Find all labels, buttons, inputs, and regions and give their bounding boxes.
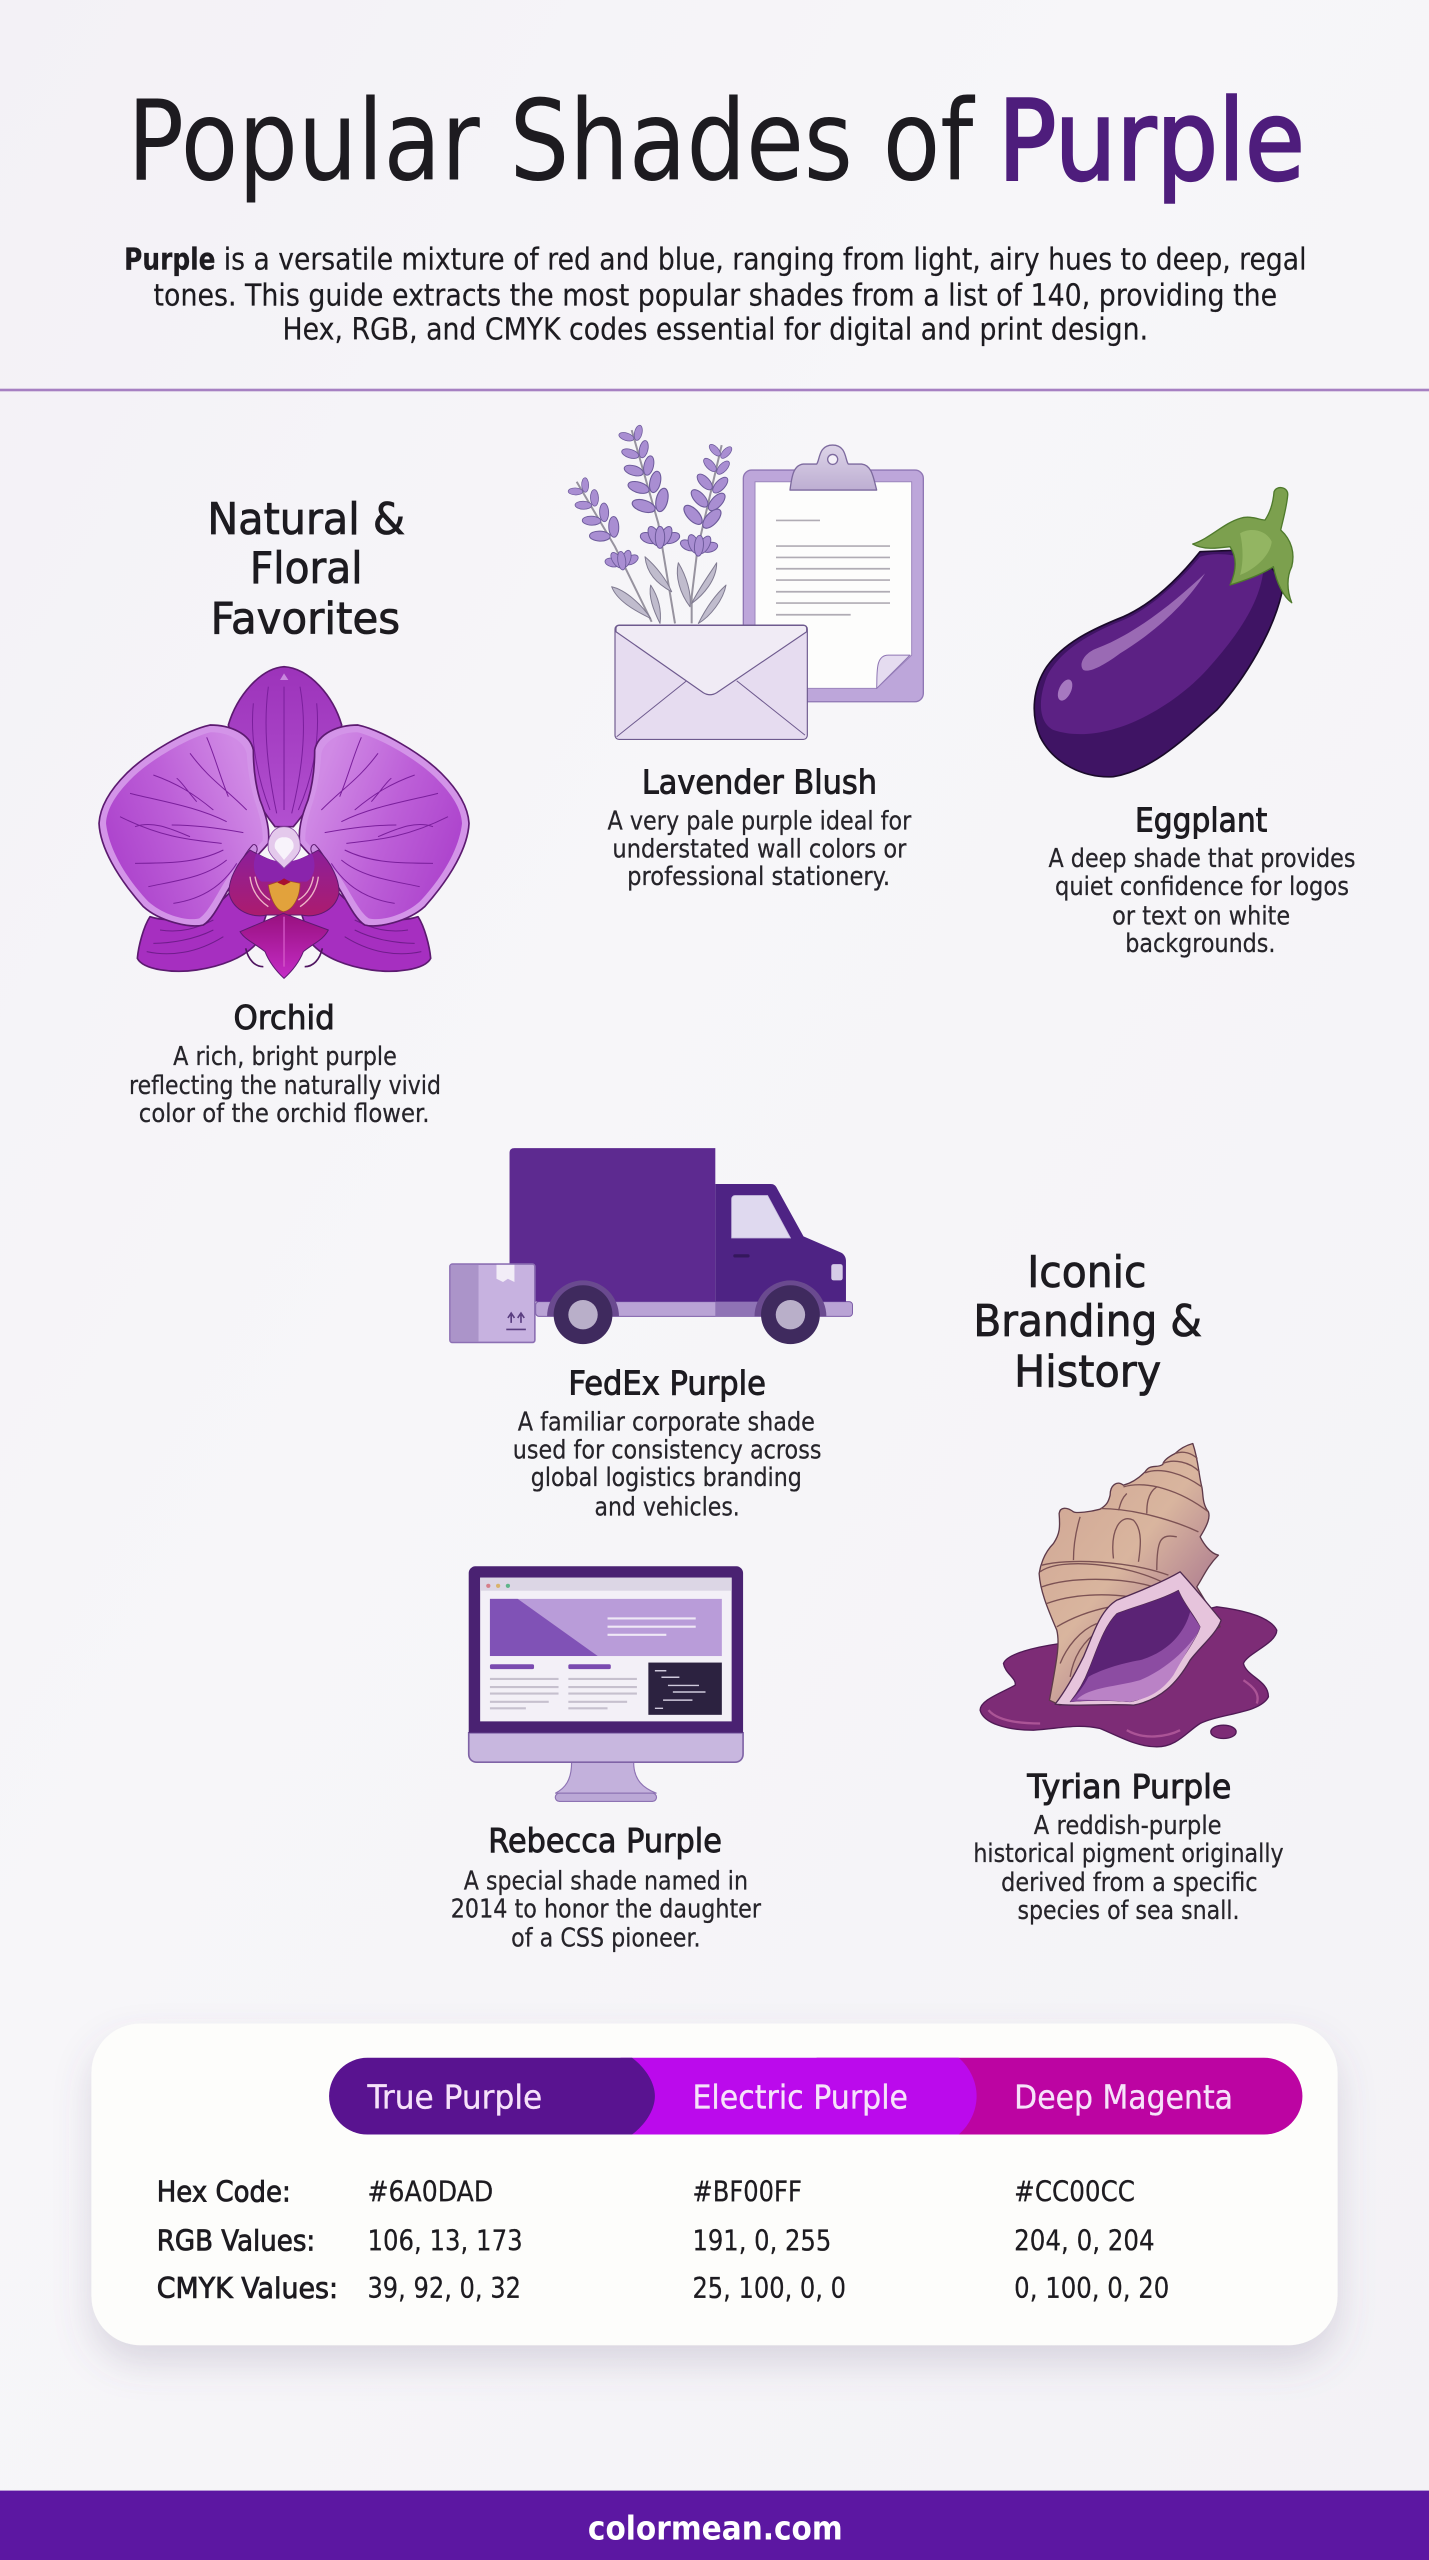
text: rebecca purple: 2014 to honor the daughter [451,1894,761,1924]
heading: iconic branding and history: Iconic [1027,1248,1146,1298]
parcel box [450,1264,535,1342]
text: eggplant: backgrounds. [1125,929,1275,959]
text: tyrian purple: Tyrian Purple [1026,1768,1231,1806]
text: eggplant: Eggplant [1135,801,1267,839]
row labels: Hex Code: [157,2175,291,2209]
electric purple values: 25, 100, 0, 0 [692,2271,846,2305]
true purple values: 106, 13, 173 [367,2224,523,2258]
intro text: Purple [124,242,216,277]
icon: eggplant [1034,488,1293,777]
text: orchid: A rich, bright purple [173,1042,397,1072]
text: eggplant: A deep shade that provides [1048,844,1356,874]
text: lavender blush [608,764,912,892]
text: lavender blush: understated wall colors or [612,834,907,864]
text: fedex purple: global logistics branding [531,1463,802,1493]
icon: computer monitor [469,1566,743,1801]
true purple values: 39, 92, 0, 32 [367,2271,521,2305]
heading: natural and floral favorites: Natural & [207,495,405,545]
text: orchid: color of the orchid flower. [139,1099,430,1129]
deep magenta values [1014,2175,1169,2305]
intro text: Hex, RGB, and CMYK codes essential for digital and print design. [283,313,1148,348]
heading: natural and floral favorites [207,495,405,645]
colour name pill: Deep Magenta [1014,2078,1233,2116]
text: orchid: reflecting the naturally vivid [129,1071,441,1101]
row labels: CMYK Values: [157,2271,338,2305]
text: fedex purple: used for consistency across [513,1435,821,1465]
text: fedex purple: and vehicles. [594,1493,740,1523]
text: lavender blush: Lavender Blush [642,764,877,802]
text: lavender blush: professional stationery. [627,862,890,892]
clipboard [743,445,923,702]
colour name pill [329,2058,1302,2135]
text: eggplant: or text on white [1112,901,1290,931]
deep magenta values: 0, 100, 0, 20 [1014,2271,1169,2305]
deep magenta values: #CC00CC [1014,2175,1135,2209]
icon: lavender, clipboard and envelope [564,423,923,739]
intro text [124,242,1307,348]
text: fedex purple: A familiar corporate shade [518,1408,815,1438]
text: tyrian purple [973,1768,1284,1926]
text: orchid [129,999,441,1129]
row labels [157,2175,338,2305]
text: eggplant: quiet confidence for logos [1055,872,1349,902]
footer band: colormean.com [588,2510,843,2548]
text: rebecca purple [451,1822,761,1954]
text: fedex purple: FedEx Purple [568,1365,766,1403]
heading: iconic branding and history: History [1014,1348,1161,1398]
envelope [615,625,807,739]
text: orchid: Orchid [234,999,335,1037]
electric purple values: 191, 0, 255 [692,2224,831,2258]
title: Popular Shades of [127,78,976,207]
text: rebecca purple: A special shade named in [464,1867,748,1897]
icon: orchid flower [99,667,469,978]
title: Purple [998,78,1305,207]
text: tyrian purple: historical pigment originally [973,1839,1284,1869]
intro text: is a versatile mixture of red and blue, ranging from light, airy hues to deep, regal [224,242,1307,277]
heading: natural and floral favorites: Floral [250,544,363,594]
footer band [0,2491,1429,2560]
lavender sprigs [564,423,735,623]
colour name pill: True Purple [367,2078,542,2116]
text: tyrian purple: species of sea snall. [1017,1896,1240,1926]
text: rebecca purple: Rebecca Purple [488,1822,722,1860]
text: tyrian purple: derived from a specific [1001,1868,1258,1898]
heading: iconic branding and history [973,1248,1202,1398]
text: lavender blush: A very pale purple ideal for [608,807,912,837]
icon: delivery truck with parcel [450,1148,853,1344]
text: fedex purple [513,1365,821,1523]
heading: iconic branding and history: Branding & [973,1297,1202,1347]
true purple values [367,2175,523,2305]
intro text: tones. This guide extracts the most popular shades from a list of 140, providing the [154,278,1277,313]
colour name pill: Electric Purple [692,2078,908,2116]
panel: colour code table [91,2024,1338,2345]
text: eggplant [1048,801,1356,959]
electric purple values: #BF00FF [692,2175,802,2209]
icon: sea snail shell in dye puddle [980,1444,1277,1747]
electric purple values [692,2175,846,2305]
text: tyrian purple: A reddish-purple [1034,1811,1222,1841]
text: rebecca purple: of a CSS pioneer. [511,1924,701,1954]
deep magenta values: 204, 0, 204 [1014,2224,1155,2258]
true purple values: #6A0DAD [367,2175,493,2209]
heading: natural and floral favorites: Favorites [211,595,400,645]
row labels: RGB Values: [157,2224,315,2258]
